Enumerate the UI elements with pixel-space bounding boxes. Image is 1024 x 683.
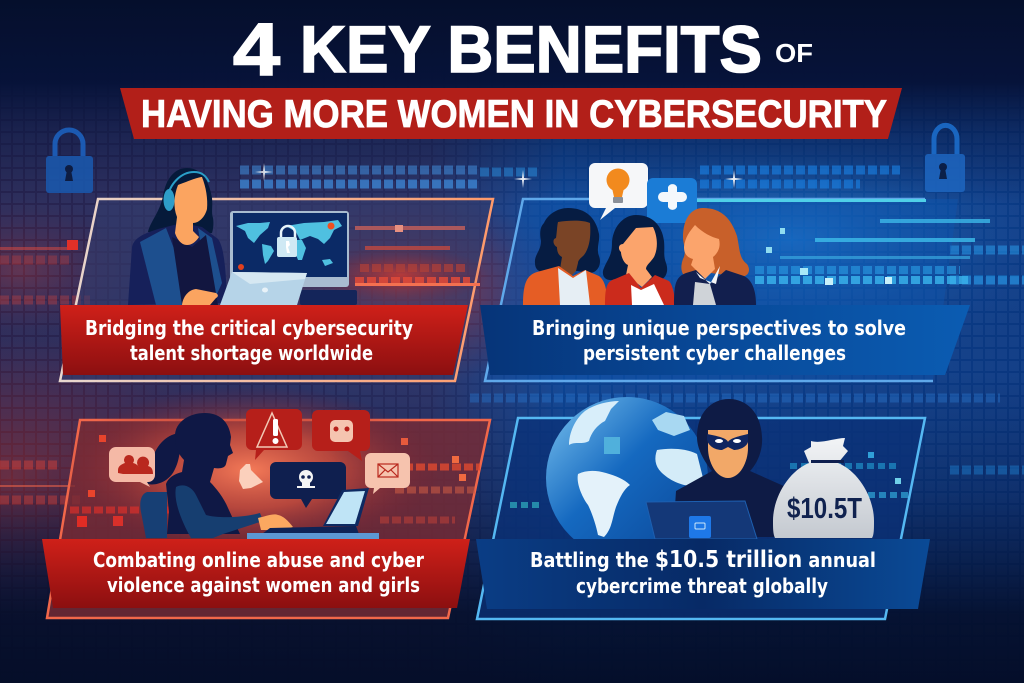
panel frame xyxy=(485,199,958,381)
caption banner: persistent cyber challenges xyxy=(583,341,846,365)
woman with headset xyxy=(128,168,227,305)
title number: 4 xyxy=(233,8,280,91)
globe xyxy=(546,397,708,539)
caption banner xyxy=(476,539,930,609)
caption banner: talent shortage worldwide xyxy=(130,341,373,365)
padlock left xyxy=(46,130,93,193)
caption banner xyxy=(60,305,468,375)
desk xyxy=(300,290,357,305)
title word: of: OF xyxy=(775,38,813,68)
bubble: people xyxy=(109,447,155,487)
speech bubble: puzzle xyxy=(647,178,697,223)
panel: cybercrime threat xyxy=(476,397,930,619)
panel: unique perspectives xyxy=(480,163,990,381)
woman right xyxy=(674,208,756,305)
money bag: $10.5T xyxy=(787,493,862,525)
hooded hacker xyxy=(673,399,794,537)
caption banner: Battling the $10.5 trillion annual xyxy=(530,547,876,573)
title: KEY BENEFITS xyxy=(300,12,762,86)
panel frame xyxy=(477,418,925,619)
laptop xyxy=(220,272,307,305)
bubble: dark skull xyxy=(270,462,346,508)
bubble: envelope xyxy=(365,453,410,494)
caption banner xyxy=(42,539,470,608)
woman silhouette xyxy=(145,413,293,538)
caption banner: Combating online abuse and cyber xyxy=(93,548,424,572)
caption banner: violence against women and girls xyxy=(107,573,420,597)
chair xyxy=(140,492,167,538)
caption banner: cybercrime threat globally xyxy=(576,574,828,598)
woman left xyxy=(523,208,607,305)
caption banner: Bridging the critical cybersecurity xyxy=(85,316,413,340)
panel: talent shortage xyxy=(60,168,493,381)
title banner: HAVING MORE WOMEN IN CYBERSECURITY xyxy=(141,93,887,136)
caption banner: Bringing unique perspectives to solve xyxy=(532,316,906,340)
data squares xyxy=(690,199,990,285)
data streaks xyxy=(67,225,490,303)
laptop xyxy=(247,488,379,539)
bubble: warning xyxy=(246,409,302,460)
padlock right xyxy=(925,125,965,192)
caption banner xyxy=(480,305,970,375)
data squares xyxy=(70,435,480,527)
panel frame xyxy=(60,199,493,381)
panel: online abuse xyxy=(42,385,490,618)
bubble: skull red xyxy=(312,410,370,461)
red glow xyxy=(60,385,440,555)
monitor with world map xyxy=(230,211,349,287)
raised hand shape xyxy=(239,464,263,489)
speech bubble: idea xyxy=(589,163,648,220)
panel frame xyxy=(47,420,490,618)
woman middle xyxy=(603,215,675,305)
money bag xyxy=(773,438,874,538)
hacker laptop xyxy=(646,501,757,539)
data squares xyxy=(510,452,910,505)
